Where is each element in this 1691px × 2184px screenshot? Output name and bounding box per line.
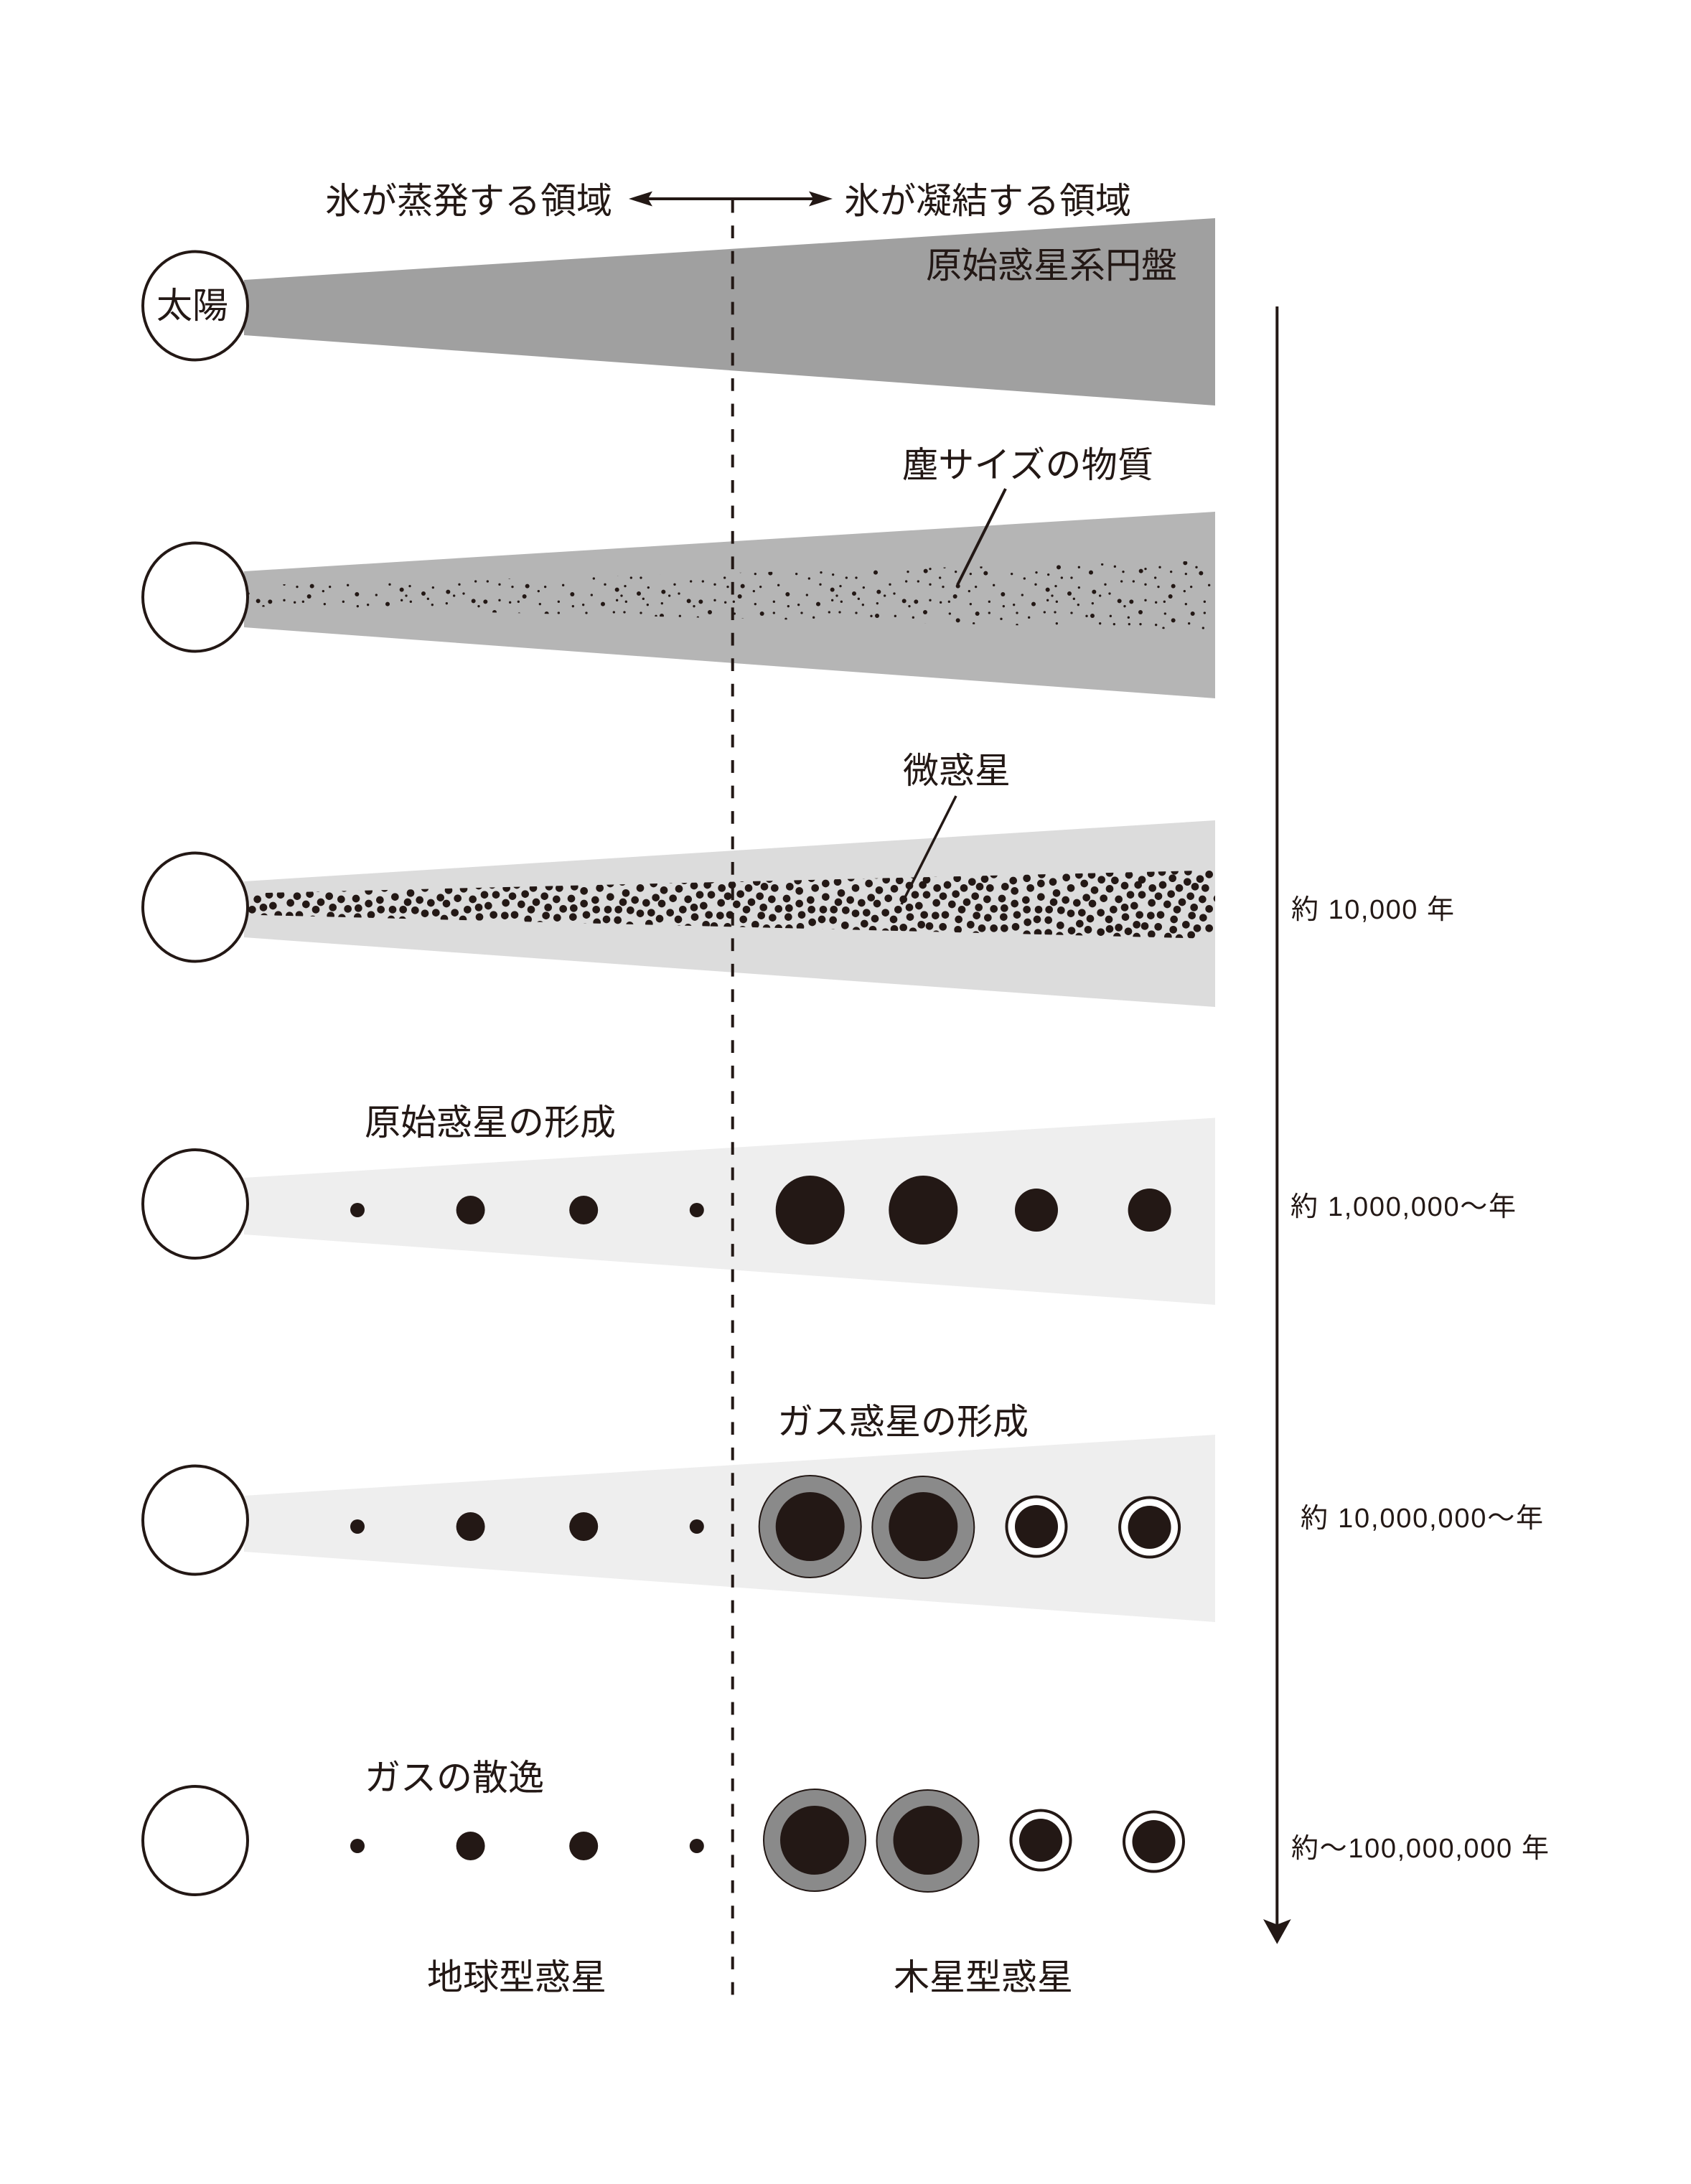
double-headed arrow	[629, 191, 833, 207]
label: gas dissipation: ガスの散逸	[365, 1758, 544, 1798]
year label 3: 約 10,000,000～年	[1301, 1504, 1543, 1534]
ice giant 2	[1120, 1497, 1179, 1557]
sun 2	[143, 543, 248, 652]
label: planetesimals: 微惑星	[903, 751, 1011, 791]
ice giant 1	[1006, 1497, 1067, 1556]
terrestrial planets row 6	[350, 1832, 704, 1860]
stage 5: gas planet formation	[244, 1402, 1215, 1622]
label: protoplanetary disk: 原始惑星系円盤	[926, 245, 1177, 286]
gas giant 1	[759, 1476, 861, 1578]
gas giant 2	[872, 1476, 974, 1578]
disk 4	[244, 1118, 1215, 1305]
label: protoplanet formation: 原始惑星の形成	[365, 1102, 616, 1143]
planets row 4	[350, 1176, 1171, 1245]
year label 1: 約 10,000 年	[1291, 895, 1454, 925]
disk 5	[244, 1435, 1215, 1622]
disk 1	[244, 218, 1215, 406]
stage 1: protoplanetary disk	[244, 218, 1215, 406]
heading right: ice condenses region: 氷が凝結する領域	[844, 181, 1131, 221]
sun 1 with label	[143, 251, 248, 360]
gas giant 4	[877, 1790, 979, 1892]
sun 4	[143, 1150, 248, 1258]
terrestrial planets row 5	[350, 1512, 704, 1541]
ice giant 4	[1124, 1812, 1184, 1872]
label: dust-sized matter: 塵サイズの物質	[902, 445, 1153, 485]
label: gas planet formation: ガス惑星の形成	[777, 1402, 1029, 1442]
snow line dashed	[731, 200, 734, 1995]
heading left: ice evaporates region: 氷が蒸発する領域	[325, 181, 612, 221]
sun 3	[143, 853, 248, 962]
bottom label: jovian planets: 木星型惑星	[894, 1957, 1073, 1997]
stage 3: planetesimals	[244, 751, 1215, 1007]
bottom label: terrestrial planets: 地球型惑星	[427, 1957, 606, 1997]
disk 2	[244, 512, 1215, 698]
dust particles	[248, 561, 1215, 630]
leader line: planetesimals	[901, 796, 956, 904]
sun 6	[143, 1786, 248, 1895]
year label 4: 約～100,000,000 年	[1291, 1834, 1549, 1864]
gas giant 3	[764, 1789, 866, 1891]
label: sun: 太陽	[156, 286, 228, 326]
stage 2: dust disk	[244, 445, 1215, 698]
planetesimal dots	[244, 870, 1215, 939]
time axis arrow	[1263, 306, 1291, 1944]
disk 3	[244, 820, 1215, 1007]
stage 6: gas dissipation	[350, 1758, 1184, 1892]
year label 2: 約 1,000,000～年	[1290, 1192, 1516, 1222]
sun 5	[143, 1466, 248, 1575]
stage 4: protoplanet formation	[244, 1102, 1215, 1305]
leader line: dust	[957, 489, 1006, 585]
ice giant 3	[1011, 1810, 1071, 1870]
